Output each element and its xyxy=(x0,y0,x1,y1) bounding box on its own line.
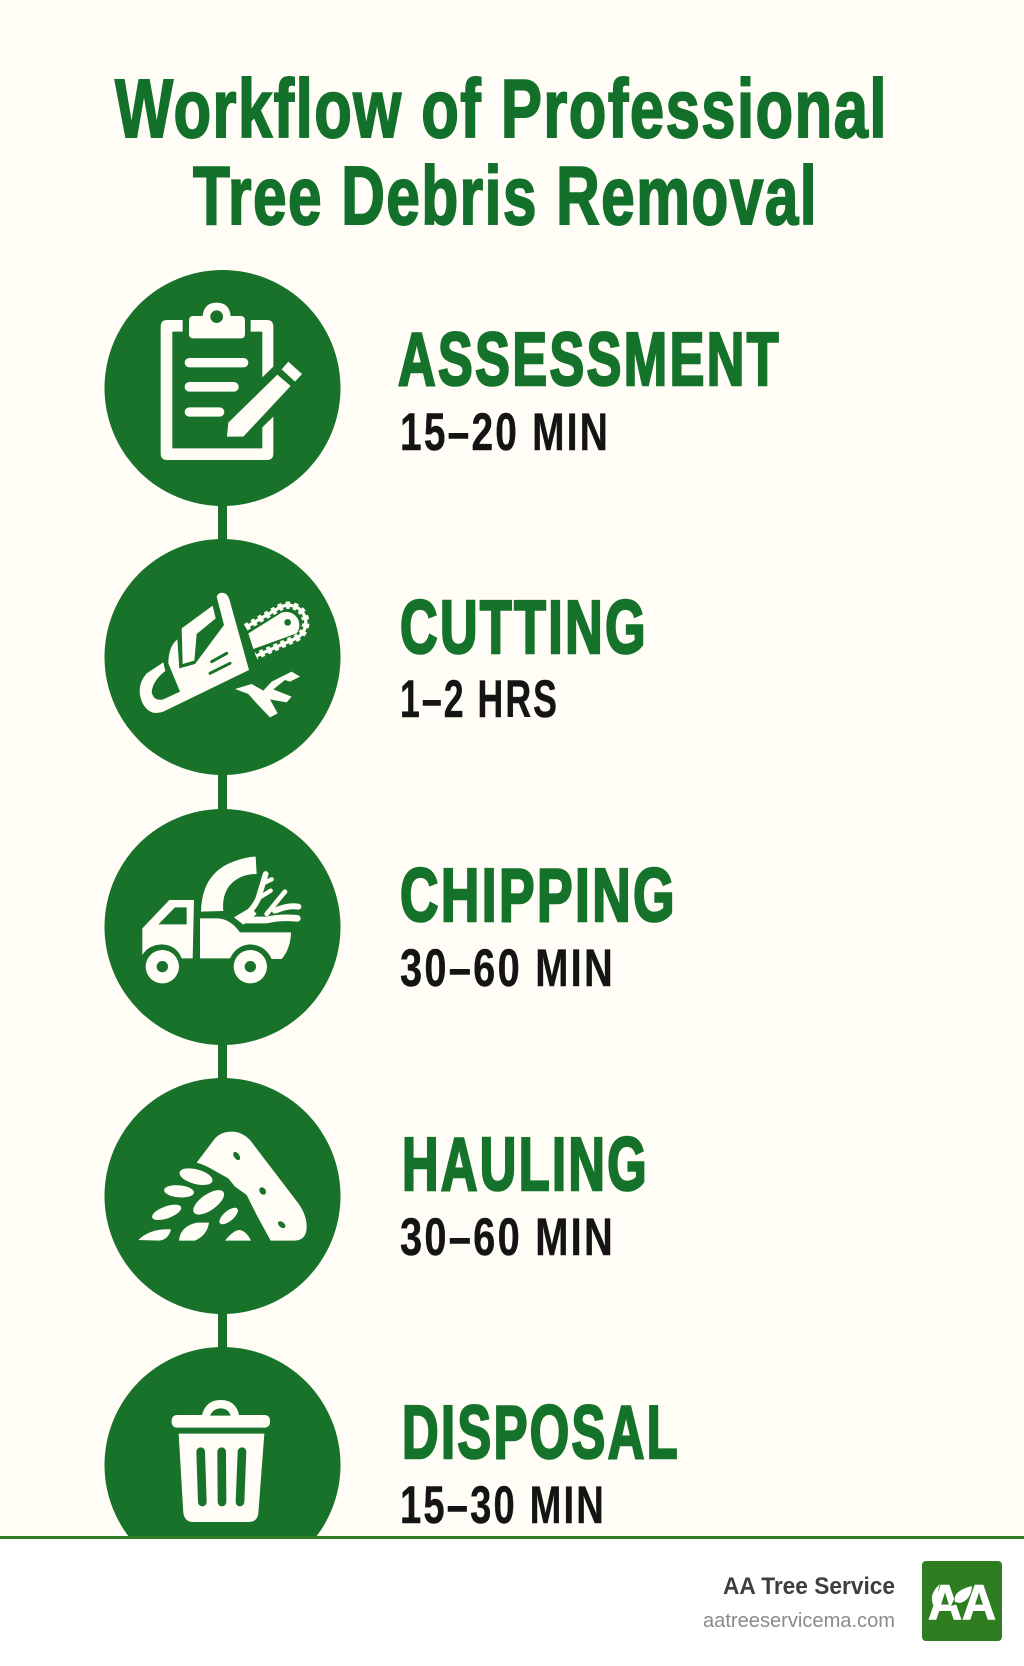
icon: trash can circle xyxy=(104,1347,340,1583)
duration: chipping: 30–60 MIN xyxy=(400,939,615,998)
duration: hauling: 30–60 MIN xyxy=(400,1208,615,1267)
icon: chipper truck circle xyxy=(104,809,340,1045)
duration: cutting: 1–2 HRS xyxy=(400,670,559,729)
step 3: chipping xyxy=(104,809,677,1045)
icon: log and wood chips circle xyxy=(104,1078,340,1314)
company name: AA Tree Service xyxy=(723,1573,895,1600)
duration: disposal: 15–30 MIN xyxy=(400,1476,606,1535)
website: aatreeservicema.com xyxy=(703,1610,895,1632)
heading: assessment: ASSESSMENT xyxy=(398,317,781,401)
step 1: assessment xyxy=(104,270,781,506)
logo xyxy=(922,1561,1002,1641)
heading: hauling: HAULING xyxy=(402,1122,649,1206)
heading: cutting: CUTTING xyxy=(400,585,648,669)
step 2: cutting xyxy=(104,539,648,775)
step 4: hauling xyxy=(104,1078,649,1314)
icon: chainsaw circle xyxy=(104,539,340,775)
step 5: disposal xyxy=(104,1347,680,1583)
connector lines xyxy=(218,500,227,1358)
heading: chipping: CHIPPING xyxy=(400,853,677,937)
duration: assessment: 15–20 MIN xyxy=(400,403,610,462)
heading: disposal: DISPOSAL xyxy=(402,1390,680,1474)
logo: AA xyxy=(928,1576,996,1630)
icon: clipboard circle xyxy=(104,270,340,506)
footer xyxy=(0,1536,1024,1666)
title xyxy=(115,62,888,242)
